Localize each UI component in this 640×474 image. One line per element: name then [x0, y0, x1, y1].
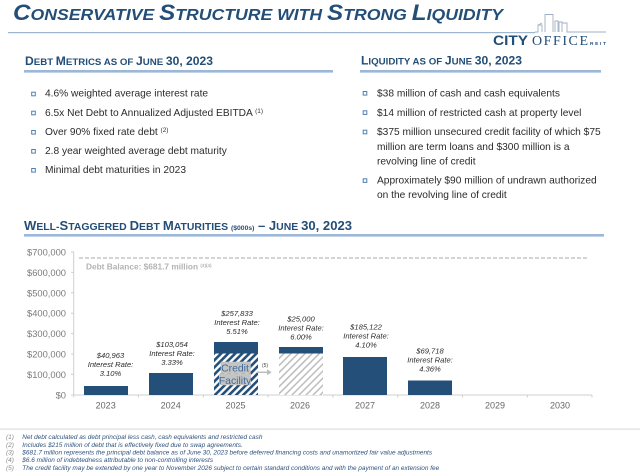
panel: liquidity [360, 56, 601, 201]
bar 2023: 3.10% [100, 369, 122, 378]
logo wordmark: city: CITY [493, 32, 529, 48]
bullet list: liquidity: $38 million of cash and cash equivalents [377, 89, 560, 100]
heading: debt maturities: WELL-STAGGERED DEBT MATURITIES ($000s) – JUNE 30, 2023 [24, 219, 352, 233]
bullet list: liquidity [363, 89, 601, 201]
bullet list: debt metrics [32, 89, 263, 176]
y axis labels: $100,000 [27, 370, 66, 380]
bar 2026: Interest Rate: [278, 324, 324, 332]
bar 2028: $69,718 [415, 346, 444, 356]
footnotes: (4) [6, 457, 14, 464]
label 2029: 2029 [485, 400, 505, 410]
bullet list: debt metrics: 6.5x Net Debt to Annualized Adjusted EBITDA [45, 108, 252, 119]
label 2030: 2030 [550, 400, 570, 410]
y axis labels: $0 [56, 390, 66, 400]
footnotes: Includes $215 million of debt that is effectively fixed due to swap agreements. [22, 442, 243, 449]
bullet list: liquidity: revolving line of credit [377, 156, 476, 168]
bar 2026: $25,000 [286, 314, 315, 324]
y axis labels: $300,000 [27, 329, 66, 339]
bar 2024: 3.33% [161, 358, 183, 367]
debt balance line: (3)(4) [200, 263, 212, 268]
bullet list: debt metrics: 4.6% weighted average interest rate [45, 89, 208, 100]
bar 2026: 2026 [290, 400, 310, 410]
debt balance line: Debt Balance: $681.7 million [86, 262, 198, 272]
bar 2027: 2027 [355, 400, 375, 410]
bar 2025 with credit facility [214, 309, 260, 410]
icon: city skyline [535, 14, 606, 32]
footnotes [6, 434, 440, 472]
bar 2025 with credit facility: Credit [221, 364, 249, 374]
footnotes: (2) [6, 442, 14, 449]
bullet list: liquidity: million are term loans and $300 million is a [377, 142, 570, 153]
logo wordmark: reit: REIT [590, 41, 606, 47]
y axis labels: $200,000 [27, 350, 66, 360]
arrow: credit extension [257, 363, 272, 375]
bar 2027 [343, 322, 389, 410]
heading: debt metrics: DEBT METRICS AS OF JUNE 30, 2023 [25, 56, 213, 68]
bar 2023: 2023 [96, 400, 116, 410]
panel: debt metrics [24, 56, 333, 176]
bar 2023: $40,963 [96, 351, 125, 360]
y axis labels: $500,000 [27, 288, 66, 298]
bullet list: debt metrics: (2) [161, 127, 168, 134]
bar 2028: 4.36% [419, 364, 441, 374]
footnotes: (5) [6, 465, 14, 472]
bar 2027: $185,122 [349, 322, 383, 332]
bar 2028: Interest Rate: [407, 356, 453, 364]
y axis labels: $700,000 [27, 248, 66, 258]
bullet list: liquidity: on the revolving line of credit [377, 190, 507, 201]
bar 2026: 6.00% [290, 332, 312, 342]
debt balance line [79, 258, 587, 272]
footnotes: (3) [6, 450, 14, 457]
bar 2025 with credit facility: Facility [219, 376, 252, 387]
bullet list: debt metrics: (1) [255, 108, 263, 115]
footnotes: $6.6 million of indebtedness attributable to non-controlling interests [21, 457, 214, 464]
bar 2024: 2024 [161, 400, 181, 410]
bar 2026 [278, 314, 324, 410]
y axis labels [27, 248, 66, 400]
bullet list: debt metrics: Over 90% fixed rate debt [45, 127, 158, 138]
bullet list: liquidity: $375 million unsecured credit facility of which $75 [377, 127, 601, 138]
axes [71, 252, 592, 398]
bar 2025 with credit facility: 5.51% [226, 327, 248, 336]
bar 2025 with credit facility: $257,833 [220, 309, 254, 318]
bar 2024: $103,054 [155, 340, 188, 349]
bar 2023: Interest Rate: [88, 360, 133, 369]
bar 2027: 4.10% [355, 340, 377, 350]
logo wordmark: office: OFFICE [532, 34, 588, 49]
bullet list: liquidity: Approximately $90 million of undrawn authorized [377, 176, 597, 186]
bar 2025 with credit facility: 2025 [225, 400, 246, 410]
bar 2024 [149, 340, 195, 410]
bar 2028: 2028 [420, 400, 440, 410]
y axis labels: $400,000 [27, 309, 66, 319]
logo: City Office REIT [493, 14, 606, 49]
footnotes: The credit facility may be extended by one year to November 2026 subject to certain standard conditions and with the payment of an extension fee [22, 465, 440, 472]
bar chart: debt maturities [27, 248, 592, 410]
bar 2023 [84, 351, 133, 410]
footnotes: (1) [6, 434, 14, 441]
bullet list: debt metrics: Minimal debt maturities in 2023 [45, 165, 186, 176]
bar 2025 with credit facility: Interest Rate: [214, 318, 260, 327]
footnotes: Net debt calculated as debt principal less cash, cash equivalents and restricted cash [22, 434, 263, 441]
title: CONSERVATIVE STRUCTURE WITH STRONG LIQUIDITY [13, 0, 504, 25]
y axis labels: $600,000 [27, 268, 66, 278]
bullet list: debt metrics: 2.8 year weighted average debt maturity [45, 146, 228, 157]
bullet list: liquidity: $14 million of restricted cash at property level [377, 108, 581, 119]
arrow: credit extension: (5) [262, 363, 268, 369]
heading: liquidity: LIQUIDITY AS OF JUNE 30, 2023 [361, 56, 522, 68]
bar 2028 [407, 346, 453, 410]
footnotes: $681.7 million represents the principal debt balance as of June 30, 2023 before deferred financing costs and unamortized fair value adjustments [21, 450, 433, 457]
bar 2027: Interest Rate: [343, 332, 389, 340]
bar 2024: Interest Rate: [149, 349, 195, 358]
